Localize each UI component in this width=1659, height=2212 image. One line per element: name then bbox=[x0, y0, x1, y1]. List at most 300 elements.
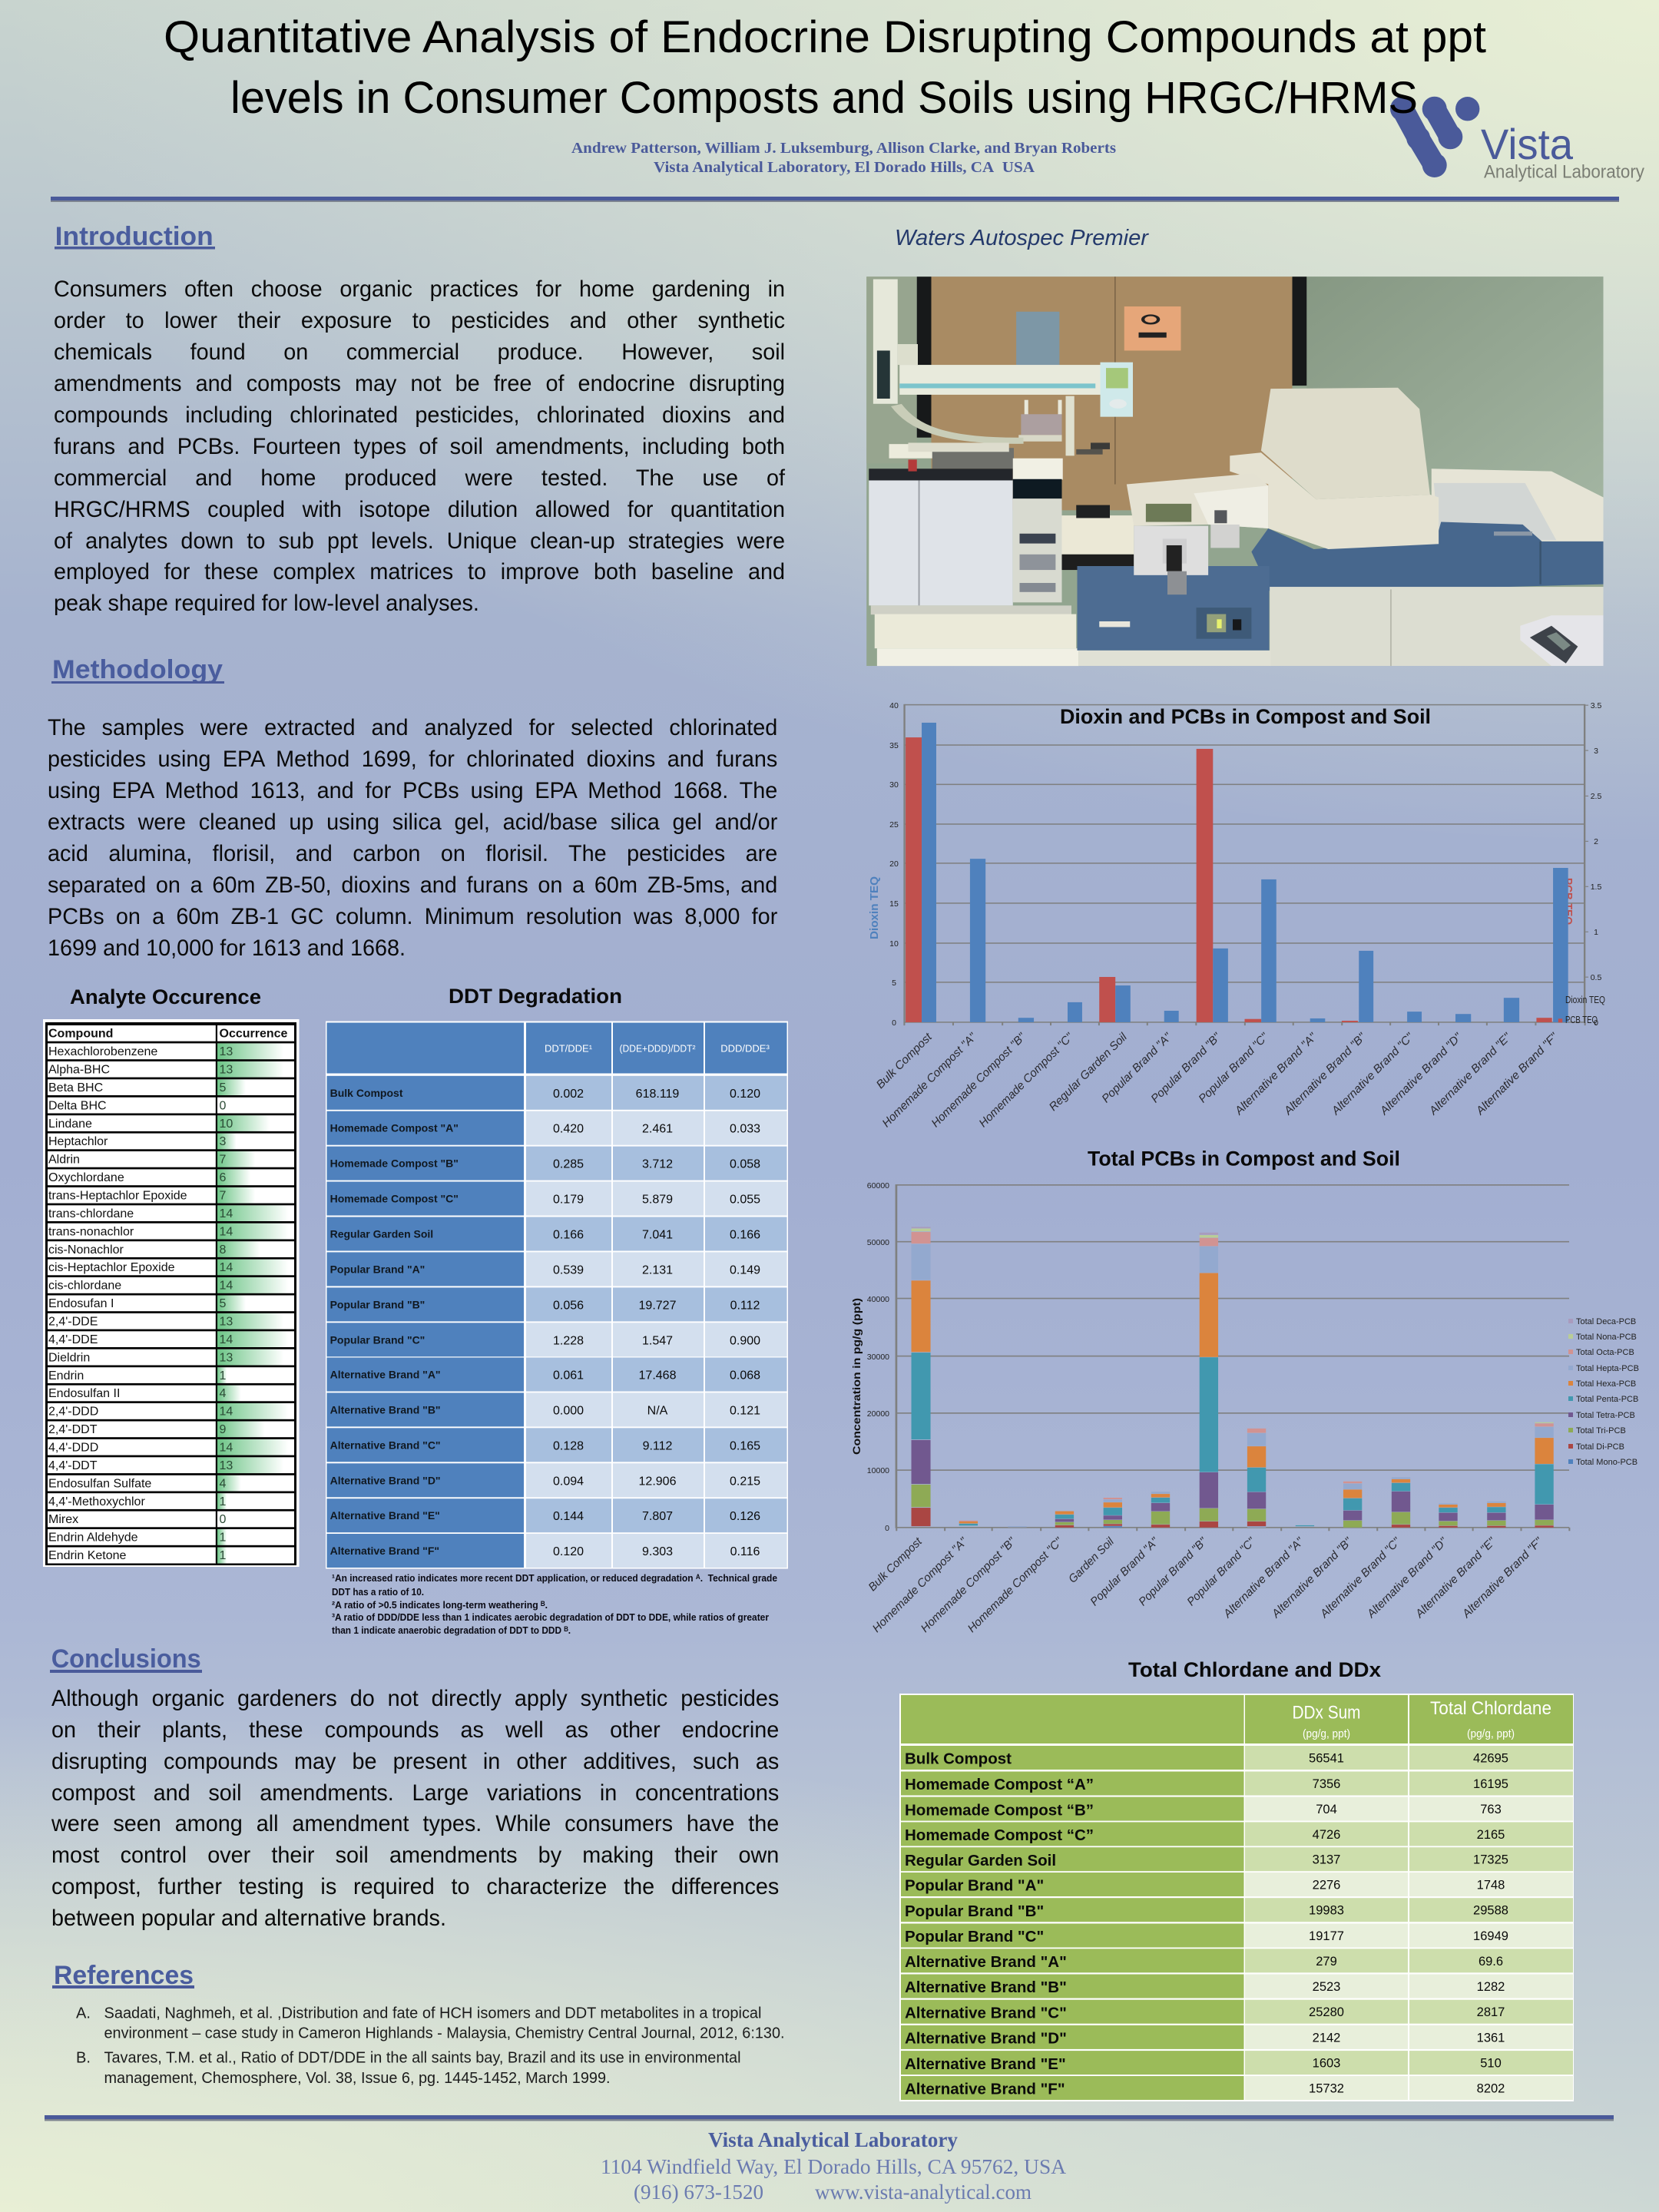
table: DDT degradation: DDD/DDE³ bbox=[720, 1043, 770, 1054]
category labels: Homemade Compost "A" bbox=[879, 1030, 979, 1130]
table: DDT degradation: 0.215 bbox=[730, 1475, 760, 1488]
table: analyte occurrence bbox=[43, 1019, 300, 1567]
table: total chlordane and DDx: 17325 bbox=[1473, 1853, 1508, 1867]
chart title: Total PCBs in Compost and Soil bbox=[1088, 1147, 1400, 1171]
table: total chlordane and DDx: 1361 bbox=[1477, 2031, 1505, 2045]
right axis labels: 0.5 bbox=[1591, 973, 1601, 982]
table: DDT degradation: 0.166 bbox=[553, 1229, 584, 1241]
chart: Total PCBs in Compost and Soil bbox=[850, 1147, 1639, 1635]
text block: introduction: Consumers often choose organic practices for home gardening in bbox=[54, 276, 785, 302]
text block: conclusions: Although organic gardeners do not directly apply synthetic pesticides bbox=[51, 1686, 779, 1711]
table: DDT degradation: 12.906 bbox=[639, 1475, 677, 1488]
y axis labels: 30000 bbox=[867, 1353, 889, 1362]
table: DDT degradation: 0.144 bbox=[553, 1510, 584, 1523]
table: analyte occurrence: trans-nonachlor bbox=[48, 1225, 134, 1238]
table: total chlordane and DDx: Popular Brand "C" bbox=[905, 1928, 1044, 1945]
footer contact details: (916) 673-1520 bbox=[634, 2181, 763, 2204]
table: DDT degradation: 0.539 bbox=[553, 1263, 584, 1277]
table: total chlordane and DDx: 56541 bbox=[1309, 1751, 1344, 1765]
table: DDT degradation: Alternative Brand "B" bbox=[330, 1403, 441, 1416]
table: DDT degradation: 9.303 bbox=[642, 1545, 673, 1558]
category labels: Regular Garden Soil bbox=[1047, 1030, 1130, 1114]
right axis labels: 3 bbox=[1594, 747, 1598, 756]
legend: Total Deca-PCB bbox=[1576, 1317, 1636, 1326]
table: DDT degradation: 0.068 bbox=[730, 1369, 760, 1382]
heading: Introduction: Introduction bbox=[55, 222, 214, 251]
table: analyte occurrence: 3 bbox=[220, 1135, 226, 1148]
right axis labels: 2 bbox=[1594, 837, 1598, 846]
table: total chlordane and DDx: Popular Brand "B" bbox=[905, 1902, 1044, 1920]
table: total chlordane and DDx: 2142 bbox=[1313, 2031, 1340, 2045]
table: total chlordane and DDx: 19177 bbox=[1309, 1929, 1344, 1943]
y axis labels: 60000 bbox=[867, 1181, 889, 1190]
table: DDT degradation: (DDE+DDD)/DDT² bbox=[619, 1043, 696, 1054]
right axis labels: 1.5 bbox=[1591, 882, 1601, 892]
category labels: Alternative Brand "A" bbox=[1220, 1535, 1306, 1621]
text block: methodology bbox=[48, 715, 777, 961]
category labels: Bulk Compost bbox=[874, 1030, 935, 1091]
footnotes for DDT table: than 1 indicate anaerobic degradation of DDT to DDD ᴮ. bbox=[332, 1624, 571, 1636]
category labels: Alternative Brand "B" bbox=[1281, 1030, 1369, 1118]
icon: Vista Analytical Laboratory logo: Analytical Laboratory bbox=[1484, 162, 1644, 183]
table: analyte occurrence: 14 bbox=[220, 1442, 233, 1455]
legend: Total Nona-PCB bbox=[1576, 1333, 1637, 1342]
table: DDT degradation: 2.131 bbox=[642, 1263, 673, 1277]
text block: conclusions: were seen among all amendment types. While consumers have the bbox=[51, 1811, 779, 1836]
table: DDT degradation: 0.285 bbox=[553, 1158, 584, 1171]
table: analyte occurrence: 2,4'-DDT bbox=[48, 1423, 98, 1436]
legend: Total Mono-PCB bbox=[1576, 1458, 1637, 1467]
table: DDT degradation: Alternative Brand "A" bbox=[330, 1369, 441, 1381]
table: analyte occurrence: 1 bbox=[220, 1369, 226, 1382]
table: analyte occurrence: Dieldrin bbox=[48, 1351, 90, 1364]
references list: management, Chemosphere, Vol. 38, Issue 6, pg. 1445-1452, March 1999. bbox=[104, 2070, 610, 2087]
table: DDT degradation: DDT/DDE¹ bbox=[545, 1043, 593, 1054]
category labels: Alternative Brand "E" bbox=[1412, 1535, 1498, 1621]
table: analyte occurrence: 0 bbox=[220, 1099, 226, 1112]
left axis labels: 5 bbox=[892, 979, 896, 988]
left axis labels: 30 bbox=[889, 780, 899, 790]
legend: Total Tetra-PCB bbox=[1576, 1411, 1635, 1420]
table: analyte occurrence: 13 bbox=[220, 1316, 233, 1329]
table: analyte occurrence: 1 bbox=[220, 1549, 226, 1562]
references list: Saadati, Naghmeh, et al. ,Distribution and fate of HCH isomers and DDT metabolites in a tropical bbox=[104, 2005, 762, 2022]
photo: Waters Autospec instrument bbox=[866, 276, 1604, 667]
table: analyte occurrence: 8 bbox=[220, 1243, 226, 1257]
table: total chlordane and DDx: 4726 bbox=[1313, 1828, 1340, 1842]
table: analyte occurrence: 4,4'-Methoxychlor bbox=[48, 1495, 145, 1508]
footnotes for DDT table: ³A ratio of DDD/DDE less than 1 indicates aerobic degradation of DDT to DDE, while ratios of greater bbox=[332, 1611, 769, 1623]
category labels: Alternative Brand "D" bbox=[1377, 1030, 1465, 1118]
legend bbox=[1568, 1317, 1639, 1467]
table: DDT degradation: 0.126 bbox=[730, 1510, 760, 1523]
table: total chlordane and DDx: Bulk Compost bbox=[905, 1750, 1012, 1768]
table: analyte occurrence: Alpha-BHC bbox=[48, 1064, 110, 1077]
table: analyte occurrence: 9 bbox=[220, 1423, 226, 1436]
category labels: Alternative Brand "D" bbox=[1364, 1535, 1450, 1621]
table: DDT degradation: Popular Brand "A" bbox=[330, 1263, 425, 1275]
table: total chlordane and DDx: 2276 bbox=[1313, 1879, 1340, 1892]
table: total chlordane and DDx: Regular Garden Soil bbox=[905, 1852, 1056, 1869]
table: analyte occurrence: Heptachlor bbox=[48, 1135, 108, 1148]
heading: Analyte Occurence: Analyte Occurence bbox=[70, 985, 261, 1008]
table: DDT degradation: Regular Garden Soil bbox=[330, 1227, 433, 1240]
text block: introduction: peak shape required for low-level analyses. bbox=[54, 591, 479, 616]
text block: conclusions: most control over their soil amendments by making their own bbox=[51, 1843, 779, 1868]
category labels: Homemade Compost "B" bbox=[919, 1535, 1018, 1635]
heading: DDT Degradation: DDT Degradation bbox=[449, 985, 622, 1008]
table: DDT degradation: 1.228 bbox=[553, 1334, 584, 1347]
legend: Total Hepta-PCB bbox=[1576, 1364, 1639, 1373]
footnotes for DDT table: ²A ratio of >0.5 indicates long-term weathering ᴮ. bbox=[332, 1599, 548, 1611]
table: DDT degradation: N/A bbox=[647, 1404, 668, 1417]
category labels: Bulk Compost bbox=[866, 1535, 925, 1594]
right axis labels: 3.5 bbox=[1591, 701, 1601, 710]
category labels: Alternative Brand "F" bbox=[1459, 1535, 1545, 1621]
authors and affiliation: Andrew Patterson, William J. Luksemburg, Allison Clarke, and Bryan Roberts bbox=[571, 140, 1116, 157]
heading: Methodology: Methodology bbox=[52, 655, 223, 684]
table: DDT degradation: Alternative Brand "D" bbox=[330, 1474, 441, 1486]
table: analyte occurrence: 2,4'-DDE bbox=[48, 1316, 98, 1329]
table: analyte occurrence: Endrin Aldehyde bbox=[48, 1532, 138, 1545]
left axis labels: 35 bbox=[889, 741, 899, 750]
legend: Total Di-PCB bbox=[1576, 1442, 1624, 1452]
table: total chlordane and DDx: 1282 bbox=[1477, 1980, 1505, 1994]
table: DDT degradation: 0.033 bbox=[730, 1123, 760, 1136]
table: DDT degradation: Alternative Brand "F" bbox=[330, 1545, 439, 1557]
y axis labels: 0 bbox=[885, 1524, 889, 1533]
table: DDT degradation: 0.900 bbox=[730, 1334, 760, 1347]
chart title: Dioxin and PCBs in Compost and Soil bbox=[1060, 705, 1431, 728]
table: analyte occurrence: 0 bbox=[220, 1513, 226, 1526]
title bbox=[164, 12, 1486, 123]
bars and gridlines bbox=[903, 704, 1588, 1025]
table: analyte occurrence: Lindane bbox=[48, 1118, 92, 1131]
caption: Waters Autospec Premier: Waters Autospec Premier bbox=[895, 226, 1149, 250]
category labels: Alternative Brand "A" bbox=[1232, 1030, 1320, 1118]
y axis labels: 50000 bbox=[867, 1238, 889, 1247]
table: total chlordane and DDx: Alternative Brand "A" bbox=[905, 1953, 1067, 1971]
table: total chlordane and DDx: Alternative Brand "F" bbox=[905, 2081, 1065, 2098]
table: analyte occurrence: 14 bbox=[220, 1207, 233, 1220]
table: analyte occurrence: cis-Nonachlor bbox=[48, 1243, 124, 1257]
table: analyte occurrence: Compound bbox=[48, 1028, 113, 1041]
table: DDT degradation: 2.461 bbox=[642, 1123, 673, 1136]
table: analyte occurrence: 13 bbox=[220, 1064, 233, 1077]
table: total chlordane and DDx: 2523 bbox=[1313, 1980, 1340, 1994]
table: DDT degradation: Homemade Compost "B" bbox=[330, 1157, 459, 1170]
table: DDT degradation: Alternative Brand "E" bbox=[330, 1509, 440, 1522]
table: analyte occurrence: 13 bbox=[220, 1459, 233, 1472]
table: analyte occurrence: 4,4'-DDD bbox=[48, 1442, 98, 1455]
references list: B. bbox=[76, 2050, 91, 2067]
authors and affiliation bbox=[571, 140, 1116, 176]
table: total chlordane and DDx: (pg/g, ppt) bbox=[1303, 1727, 1350, 1740]
authors and affiliation: Vista Analytical Laboratory, El Dorado Hills, CA USA bbox=[654, 159, 1035, 176]
table: analyte occurrence: 1 bbox=[220, 1532, 226, 1545]
table: DDT degradation: 0.149 bbox=[730, 1263, 760, 1277]
table: DDT degradation: 0.002 bbox=[553, 1088, 584, 1101]
text block: methodology: separated on a 60m ZB-50, dioxins and furans on a 60m ZB-5ms, and bbox=[48, 873, 777, 898]
table: total chlordane and DDx: 29588 bbox=[1473, 1904, 1508, 1918]
table: DDT degradation: Bulk Compost bbox=[330, 1087, 403, 1099]
table: DDT degradation: 17.468 bbox=[639, 1369, 677, 1382]
table: total chlordane and DDx: 2165 bbox=[1477, 1828, 1505, 1842]
table: total chlordane and DDx: Homemade Compost “C” bbox=[905, 1826, 1094, 1844]
table: DDT degradation: Homemade Compost "A" bbox=[330, 1122, 459, 1134]
category labels: Homemade Compost "C" bbox=[965, 1535, 1065, 1635]
left axis labels: 25 bbox=[889, 820, 899, 830]
table: DDT degradation: 0.055 bbox=[730, 1194, 760, 1206]
table: analyte occurrence: cis-chlordane bbox=[48, 1280, 121, 1293]
title: levels in Consumer Composts and Soils using HRGC/HRMS bbox=[230, 73, 1418, 123]
text block: conclusions bbox=[51, 1686, 779, 1931]
table: total chlordane and DDx: Popular Brand "A" bbox=[905, 1877, 1044, 1895]
text block: conclusions: compost, further testing is required to characterize the differences bbox=[51, 1874, 779, 1899]
text block: conclusions: compost and soil amendments. Large variations in concentrations bbox=[51, 1780, 779, 1806]
table: total chlordane and DDx: 3137 bbox=[1313, 1853, 1340, 1867]
table: analyte occurrence: trans-chlordane bbox=[48, 1207, 134, 1220]
text block: introduction: commercial and home produced were tested. The use of bbox=[54, 465, 785, 491]
table: analyte occurrence: Occurrence bbox=[220, 1028, 288, 1041]
table: total chlordane and DDx: 1603 bbox=[1313, 2057, 1340, 2071]
left axis labels: 15 bbox=[889, 899, 899, 909]
text block: conclusions: on their plants, these compounds as well as other endocrine bbox=[51, 1717, 779, 1743]
table: DDT degradation: 5.879 bbox=[642, 1194, 673, 1206]
table: analyte occurrence: Oxychlordane bbox=[48, 1171, 124, 1184]
table: DDT degradation: 1.547 bbox=[642, 1334, 673, 1347]
table: total chlordane and DDx: 1748 bbox=[1477, 1879, 1505, 1892]
right axis labels: 1 bbox=[1594, 928, 1598, 937]
table: total chlordane and DDx: Homemade Compost “A” bbox=[905, 1776, 1094, 1793]
legend: Dioxin TEQ bbox=[1565, 994, 1605, 1005]
footnotes for DDT table: ¹An increased ratio indicates more recent DDT application, or reduced degradation ᴬ. Technical grade bbox=[332, 1572, 777, 1584]
left axis labels: 20 bbox=[889, 859, 899, 869]
legend: Total Octa-PCB bbox=[1576, 1348, 1634, 1357]
table: analyte occurrence: 4 bbox=[220, 1387, 226, 1400]
category labels bbox=[874, 1030, 1561, 1130]
table: analyte occurrence: 13 bbox=[220, 1045, 233, 1058]
text block: conclusions: disrupting compounds may be present in other additives, such as bbox=[51, 1749, 779, 1774]
y axis labels: 10000 bbox=[867, 1466, 889, 1475]
footer contact details: www.vista-analytical.com bbox=[815, 2181, 1031, 2204]
table: DDT degradation: 0.420 bbox=[553, 1123, 584, 1136]
legend bbox=[1565, 994, 1605, 1025]
right axis labels: 2.5 bbox=[1591, 792, 1601, 801]
table: total chlordane and DDx: Alternative Brand "C" bbox=[905, 2004, 1067, 2022]
table: total chlordane and DDx: Homemade Compost “B” bbox=[905, 1801, 1094, 1819]
table: analyte occurrence: trans-Heptachlor Epoxide bbox=[48, 1190, 187, 1203]
text block: introduction: compounds including chlorinated pesticides, chlorinated dioxins and bbox=[54, 402, 785, 428]
text block: introduction: furans and PCBs. Fourteen types of soil amendments, including both bbox=[54, 434, 785, 459]
table: DDT degradation: Homemade Compost "C" bbox=[330, 1192, 459, 1204]
references list: A. bbox=[76, 2005, 91, 2022]
table: DDT degradation: Popular Brand "C" bbox=[330, 1333, 425, 1346]
table: total chlordane and DDx: 25280 bbox=[1309, 2005, 1344, 2019]
table: analyte occurrence: 1 bbox=[220, 1495, 226, 1508]
table: analyte occurrence: 2,4'-DDD bbox=[48, 1406, 98, 1419]
category labels: Alternative Brand "E" bbox=[1426, 1030, 1514, 1118]
table: total chlordane and DDx: 2817 bbox=[1477, 2005, 1505, 2019]
footnotes for DDT table bbox=[332, 1572, 777, 1636]
table: DDT degradation: 0.128 bbox=[553, 1439, 584, 1452]
table: analyte occurrence: Aldrin bbox=[48, 1154, 80, 1167]
table: DDT degradation: 0.121 bbox=[730, 1404, 760, 1417]
table: analyte occurrence: Endosulfan Sulfate bbox=[48, 1477, 151, 1490]
y axis labels: 40000 bbox=[867, 1295, 889, 1304]
table: analyte occurrence: Endosulfan II bbox=[48, 1387, 120, 1400]
category labels: Popular Brand "B" bbox=[1136, 1535, 1210, 1608]
table: DDT degradation: 7.807 bbox=[642, 1510, 673, 1523]
text block: methodology: The samples were extracted and analyzed for selected chlorinated bbox=[48, 715, 777, 740]
table: analyte occurrence: 5 bbox=[220, 1297, 226, 1310]
text block: methodology: 1699 and 10,000 for 1613 and 1668. bbox=[48, 935, 406, 961]
table: total chlordane and DDx: Alternative Brand "E" bbox=[905, 2055, 1066, 2073]
text block: methodology: PCBs on a 60m ZB-1 GC column. Minimum resolution was 8,000 for bbox=[48, 904, 777, 929]
text block: introduction: employed for these complex matrices to improve both baseline and bbox=[54, 559, 785, 584]
table: total chlordane and DDx: 16195 bbox=[1473, 1777, 1508, 1791]
footer contact details bbox=[601, 2128, 1067, 2204]
text block: methodology: using EPA Method 1613, and for PCBs using EPA Method 1668. The bbox=[48, 778, 777, 803]
text block: conclusions: between popular and alternative brands. bbox=[51, 1906, 446, 1931]
stacked bars and gridlines bbox=[896, 1184, 1570, 1531]
table: analyte occurrence: 14 bbox=[220, 1261, 233, 1274]
table: DDT degradation: 0.165 bbox=[730, 1439, 760, 1452]
table: total chlordane and DDx: Alternative Brand "B" bbox=[905, 1979, 1067, 1996]
table: DDT degradation: 0.058 bbox=[730, 1158, 760, 1171]
category labels: Alternative Brand "C" bbox=[1329, 1030, 1416, 1118]
table: total chlordane and DDx: 19983 bbox=[1309, 1904, 1344, 1918]
right axis labels: 0 bbox=[1594, 1018, 1598, 1028]
footnotes for DDT table: DDT has a ratio of 10. bbox=[332, 1586, 424, 1598]
chart: Dioxin and PCBs in Compost and Soil bbox=[868, 701, 1605, 1130]
legend: Total Hexa-PCB bbox=[1576, 1379, 1636, 1389]
category labels: Popular Brand "C" bbox=[1184, 1535, 1258, 1608]
table: DDT degradation: 0.120 bbox=[553, 1545, 584, 1558]
category labels: Popular Brand "A" bbox=[1099, 1030, 1174, 1105]
category labels: Homemade Compost "A" bbox=[870, 1535, 970, 1635]
text block: methodology: acid alumina, florisil, and carbon on florisil. The pesticides are bbox=[48, 841, 777, 866]
table: DDT degradation: 0.094 bbox=[553, 1475, 584, 1488]
text block: introduction: order to lower their exposure to pesticides and other synthetic bbox=[54, 308, 785, 333]
table: total chlordane and DDx: 704 bbox=[1316, 1803, 1337, 1816]
legend: Total Penta-PCB bbox=[1576, 1395, 1638, 1404]
table: DDT degradation: 0.112 bbox=[730, 1299, 760, 1312]
category labels: Alternative Brand "C" bbox=[1317, 1535, 1403, 1621]
table: total chlordane and DDx: DDx Sum bbox=[1292, 1702, 1361, 1724]
y axis labels bbox=[867, 1181, 889, 1533]
table: DDT degradation: Popular Brand "B" bbox=[330, 1298, 425, 1310]
heading: Conclusions: Conclusions bbox=[51, 1644, 201, 1674]
heading: Total Chlordane and DDx: Total Chlordane and DDx bbox=[1128, 1658, 1381, 1681]
legend: PCB TEQ bbox=[1565, 1014, 1598, 1025]
references list: environment – case study in Cameron Highlands - Malaysia, Chemistry Central Journal, 2012, 6:130. bbox=[104, 2025, 785, 2042]
table: total chlordane and DDx: 16949 bbox=[1473, 1929, 1508, 1943]
text block: introduction bbox=[54, 276, 785, 616]
table: analyte occurrence: 4,4'-DDE bbox=[48, 1333, 98, 1346]
y axis labels: 20000 bbox=[867, 1409, 889, 1419]
table: analyte occurrence: cis-Heptachlor Epoxide bbox=[48, 1261, 175, 1274]
table: total chlordane and DDx: 8202 bbox=[1477, 2081, 1505, 2095]
table: total chlordane and DDx: 15732 bbox=[1309, 2081, 1344, 2095]
category labels bbox=[866, 1535, 1545, 1635]
legend: Total Tri-PCB bbox=[1576, 1426, 1626, 1435]
table: total chlordane and DDx: Total Chlordane bbox=[1430, 1698, 1551, 1719]
right axis labels bbox=[1591, 701, 1601, 1028]
left axis labels: 10 bbox=[889, 939, 899, 949]
table: total chlordane and DDx: 7356 bbox=[1313, 1777, 1340, 1791]
table: analyte occurrence: Mirex bbox=[48, 1513, 78, 1526]
references list: Tavares, T.M. et al., Ratio of DDT/DDE in the all saints bay, Brazil and its use in environmental bbox=[104, 2050, 740, 2067]
table: analyte occurrence: 10 bbox=[220, 1118, 233, 1131]
table: total chlordane and DDx: 42695 bbox=[1473, 1751, 1508, 1765]
table: analyte occurrence: 4,4'-DDT bbox=[48, 1459, 98, 1472]
text block: introduction: of analytes down to sub ppt levels. Unique clean-up strategies were bbox=[54, 528, 785, 554]
category labels: Homemade Compost "B" bbox=[929, 1030, 1028, 1130]
category labels: Homemade Compost "C" bbox=[976, 1030, 1076, 1130]
table: analyte occurrence: 14 bbox=[220, 1280, 233, 1293]
table: analyte occurrence: Beta BHC bbox=[48, 1081, 103, 1094]
table: analyte occurrence: 6 bbox=[220, 1171, 226, 1184]
title: Quantitative Analysis of Endocrine Disrupting Compounds at ppt bbox=[164, 12, 1486, 62]
table: DDT degradation: 19.727 bbox=[639, 1299, 677, 1312]
table: analyte occurrence: 14 bbox=[220, 1406, 233, 1419]
table: DDT degradation: Alternative Brand "C" bbox=[330, 1439, 441, 1451]
table: total chlordane and DDx: 763 bbox=[1480, 1803, 1502, 1816]
table: total chlordane and DDx bbox=[899, 1694, 1574, 2101]
left axis labels: 40 bbox=[889, 701, 899, 710]
text block: methodology: extracts were cleaned up using silica gel, acid/base silica gel and/or bbox=[48, 810, 777, 835]
table: analyte occurrence: Delta BHC bbox=[48, 1099, 107, 1112]
text block: introduction: amendments and composts may not be free of endocrine disrupting bbox=[54, 371, 785, 396]
references list bbox=[76, 2005, 785, 2087]
table: DDT degradation: 7.041 bbox=[642, 1229, 673, 1241]
table: total chlordane and DDx: (pg/g, ppt) bbox=[1467, 1727, 1515, 1740]
category labels: Garden Soil bbox=[1066, 1535, 1117, 1586]
table: DDT degradation: 0.056 bbox=[553, 1299, 584, 1312]
table: DDT degradation: 0.179 bbox=[553, 1194, 584, 1206]
table: DDT degradation: 0.166 bbox=[730, 1229, 760, 1241]
table: total chlordane and DDx: 69.6 bbox=[1479, 1955, 1503, 1969]
table: DDT degradation: 3.712 bbox=[642, 1158, 673, 1171]
table: DDT degradation: 0.061 bbox=[553, 1369, 584, 1382]
icon: Vista Analytical Laboratory logo: Vista bbox=[1481, 120, 1574, 168]
category labels: Popular Brand "C" bbox=[1196, 1030, 1271, 1105]
table: analyte occurrence: 5 bbox=[220, 1081, 226, 1094]
axis title: Dioxin TEQ: Dioxin TEQ bbox=[868, 876, 881, 939]
table: analyte occurrence: 13 bbox=[220, 1351, 233, 1364]
category labels: Popular Brand "A" bbox=[1088, 1535, 1161, 1608]
axis title: PCB TEQ: PCB TEQ bbox=[1561, 878, 1575, 925]
table: DDT degradation: 618.119 bbox=[636, 1088, 679, 1101]
icon: Vista Analytical Laboratory logo bbox=[1390, 97, 1644, 183]
category labels: Alternative Brand "F" bbox=[1473, 1030, 1561, 1118]
table: DDT degradation bbox=[326, 1022, 788, 1568]
category labels: Popular Brand "B" bbox=[1148, 1030, 1224, 1105]
table: DDT degradation: 0.116 bbox=[730, 1545, 760, 1558]
table: analyte occurrence: 14 bbox=[220, 1225, 233, 1238]
table: total chlordane and DDx: 510 bbox=[1480, 2057, 1502, 2071]
left axis labels bbox=[889, 701, 899, 1028]
footer contact details: Vista Analytical Laboratory bbox=[708, 2128, 958, 2151]
footer contact details: 1104 Windfield Way, El Dorado Hills, CA 95762, USA bbox=[601, 2155, 1067, 2178]
category labels: Alternative Brand "B" bbox=[1269, 1535, 1355, 1621]
text block: introduction: HRGC/HRMS coupled with isotope dilution allowed for quantitation bbox=[54, 497, 785, 522]
text block: methodology: pesticides using EPA Method 1699, for chlorinated dioxins and furans bbox=[48, 747, 777, 772]
table: DDT degradation: 0.120 bbox=[730, 1088, 760, 1101]
table: analyte occurrence: 4 bbox=[220, 1477, 226, 1490]
table: total chlordane and DDx: Alternative Brand "D" bbox=[905, 2030, 1067, 2048]
